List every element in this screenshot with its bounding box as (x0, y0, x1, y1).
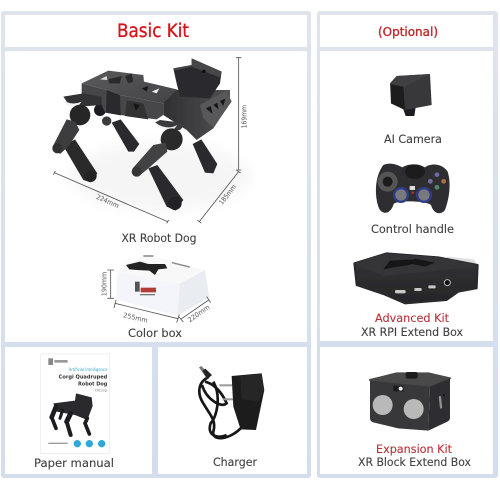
heading: Basic Kit: Basic Kit (117, 21, 189, 42)
label: Charger: Charger (213, 455, 257, 469)
image: manual booklet: Robot Dog (78, 381, 107, 387)
dimension: length 224mm: 224mm (95, 193, 120, 210)
dimension: box length 255mm: 255mm (122, 311, 149, 325)
heading: Optional: (Optional) (378, 25, 438, 39)
panel: expansion kit (320, 347, 493, 474)
dimension: height 169mm: 169mm (241, 105, 249, 128)
panel: charger (158, 347, 307, 474)
label: XR Robot Dog: XR Robot Dog (122, 231, 196, 245)
label: Advanced Kit: Advanced Kit (375, 311, 449, 325)
label: XR Block Extend Box: XR Block Extend Box (358, 455, 471, 469)
label: Expansion Kit: Expansion Kit (376, 442, 452, 456)
dimension: box length 255mm (114, 300, 179, 325)
image: manual booklet: XRCorgi (95, 389, 107, 393)
dimension: height 169mm (236, 58, 249, 170)
image: RPI extend box (354, 253, 478, 303)
panel: paper manual (5, 347, 152, 474)
label: Color box: Color box (128, 326, 182, 340)
image: charger (199, 366, 264, 438)
image: AI camera (390, 74, 432, 116)
dimension: width 185mm: 185mm (217, 183, 238, 206)
image: control handle gamepad (376, 164, 450, 213)
panel: optional heading (320, 15, 493, 47)
panel: optional accessories (320, 51, 493, 341)
dimension: box width 220mm: 220mm (186, 303, 211, 324)
image: robot dog (52, 58, 250, 211)
label: AI Camera: AI Camera (384, 132, 442, 146)
dimension: length 224mm (53, 171, 169, 223)
dimension: box height 190mm (101, 270, 114, 298)
label: Control handle: Control handle (371, 222, 454, 236)
panel: optional frame (317, 11, 498, 478)
dimension: box width 220mm (179, 297, 211, 324)
image: manual booklet: Artificial Intelligence (69, 367, 108, 372)
image: manual booklet (41, 354, 109, 453)
panel: robot dog and colour box (5, 51, 307, 342)
image: manual booklet: Corgi Quadruped (59, 374, 107, 380)
dimension: box height 190mm: 190mm (101, 272, 109, 296)
label: XR RPI Extend Box: XR RPI Extend Box (361, 325, 463, 339)
label: Paper manual: Paper manual (34, 456, 114, 470)
panel: basic kit heading (5, 15, 307, 47)
image: XR Block extend box (370, 372, 450, 431)
image: colour box (116, 255, 209, 316)
dimension: width 185mm (197, 170, 241, 223)
panel: page frame (1, 11, 311, 478)
